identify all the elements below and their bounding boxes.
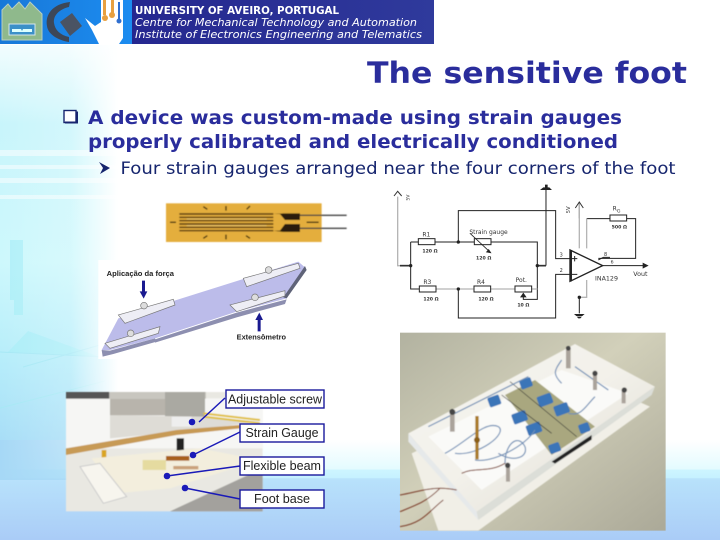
icon: square bullet xyxy=(64,110,77,122)
diagram: force application on beam: Extensômetro xyxy=(237,335,286,342)
circuit diagram: 8 xyxy=(604,252,607,258)
circuit diagram: R1 xyxy=(422,232,430,239)
circuit diagram: 500 Ω xyxy=(612,224,627,230)
icon: university logo xyxy=(2,2,42,40)
circuit diagram: 120 Ω xyxy=(422,249,438,255)
callout leaders xyxy=(164,398,240,499)
circuit diagram: 3 xyxy=(560,252,563,258)
circuit diagram: 120 Ω xyxy=(478,297,494,303)
sub bullet text: Four strain gauges arranged near the four corners of the foot xyxy=(120,159,676,179)
photo: assembled sensitive foot xyxy=(400,333,666,531)
annotated photo: foot mechanism xyxy=(66,390,324,511)
callout: strain gauge xyxy=(240,424,324,442)
callout: adjustable screw: Adjustable screw xyxy=(228,392,323,406)
arrow: strain gauge position xyxy=(255,313,263,331)
circuit diagram: R3 xyxy=(423,279,431,286)
circuit diagram: 120 Ω xyxy=(476,255,491,261)
callout: flexible beam: Flexible beam xyxy=(243,459,321,473)
photo background xyxy=(66,392,263,511)
header institution band: Centre for Mechanical Technology and Automation xyxy=(135,18,417,29)
icon: arrow bullet xyxy=(99,162,110,174)
circuit diagram: INA129 xyxy=(595,276,618,283)
circuit diagram: Vout xyxy=(633,271,648,278)
circuit diagram xyxy=(394,183,662,319)
circuit diagram: 120 Ω xyxy=(423,297,439,303)
circuit diagram: R xyxy=(613,206,617,213)
circuit diagram: 2 xyxy=(560,268,563,274)
header institution band xyxy=(132,0,434,44)
icon: mechanical centre logo xyxy=(47,2,82,42)
header logos strip xyxy=(0,0,132,44)
header institution band: Institute of Electronics Engineering and Telematics xyxy=(135,30,423,41)
title: The sensitive foot xyxy=(367,56,687,90)
icon: hand logo xyxy=(85,0,123,44)
header institution band: UNIVERSITY OF AVEIRO, PORTUGAL xyxy=(135,6,339,17)
main bullet text: properly calibrated and electrically conditioned xyxy=(88,131,618,153)
callout: foot base xyxy=(240,490,324,508)
photo: strain gauge xyxy=(166,203,347,242)
circuit diagram: 5V xyxy=(405,194,411,201)
circuit diagram: Strain gauge xyxy=(469,229,508,236)
diagram: force application on beam: Aplicação da força xyxy=(107,271,174,278)
circuit diagram: G xyxy=(617,208,621,214)
diagram: force application on beam xyxy=(98,260,307,359)
callout: strain gauge: Strain Gauge xyxy=(246,426,319,440)
circuit diagram: 5V xyxy=(566,206,572,213)
circuit diagram: 6 xyxy=(611,259,614,265)
circuit diagram: R4 xyxy=(477,279,485,286)
circuit diagram: Pot. xyxy=(516,277,527,284)
callout: foot base: Foot base xyxy=(254,492,310,506)
main bullet text: A device was custom-made using strain gauges xyxy=(88,107,622,129)
main bullet text xyxy=(64,107,622,153)
arrow: force xyxy=(140,281,147,299)
circuit diagram: 10 Ω xyxy=(517,303,529,309)
